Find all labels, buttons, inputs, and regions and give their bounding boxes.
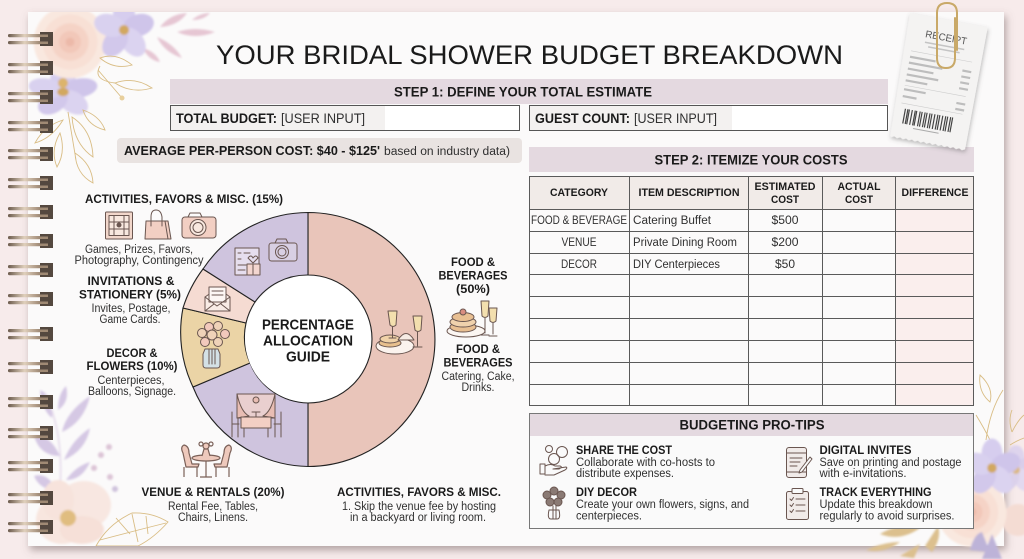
cost table xyxy=(529,176,974,406)
donut centre label: GUIDE xyxy=(286,348,330,366)
receipt: RECEIPT xyxy=(924,29,968,48)
note: activities, favors and misc tip xyxy=(337,485,501,524)
icon: bouquet xyxy=(543,487,565,519)
icon: hand with coins xyxy=(540,446,568,475)
tip: share the cost: SHARE THE COST xyxy=(576,443,673,457)
tip: share the cost: distribute expenses. xyxy=(576,468,674,480)
tip: diy decor: Create your own flowers, signs, and xyxy=(576,499,749,511)
label: invitations and stationery 5%: Invites, Postage, xyxy=(92,303,170,315)
step 1 header xyxy=(170,79,888,104)
note: activities, favors and misc tip: ACTIVITIES, FAVORS & MISC. xyxy=(337,485,501,499)
label: food and beverages 50%: FOOD & xyxy=(456,342,500,356)
tip: diy decor: DIY DECOR xyxy=(576,485,637,499)
receipt with paper clip xyxy=(887,3,988,151)
label: food and beverages 50%: Drinks. xyxy=(462,382,494,394)
label: decor and flowers 10%: Centerpieces, xyxy=(98,375,164,387)
receipt xyxy=(887,13,988,151)
floral decoration: top left xyxy=(25,0,215,183)
step 1 header: STEP 1: DEFINE YOUR TOTAL ESTIMATE xyxy=(394,84,652,100)
tip: track everything: TRACK EVERYTHING xyxy=(820,485,932,499)
row: food and beverage: $500 xyxy=(772,215,798,227)
tip: diy decor xyxy=(543,485,749,522)
table header row xyxy=(529,176,974,209)
label: food and beverages 50%: BEVERAGES xyxy=(438,268,508,282)
paper clip xyxy=(937,3,957,68)
label: food and beverages 50% xyxy=(438,255,514,394)
note: activities, favors and misc tip: 1. Skip the venue fee by hosting xyxy=(342,501,496,513)
table header row: CATEGORY xyxy=(550,187,609,199)
segment: decor and flowers 10% xyxy=(181,308,250,387)
total budget input: TOTAL BUDGET: xyxy=(176,111,277,126)
guest count input: GUEST COUNT: xyxy=(535,111,630,126)
label: venue and rentals 20%: Rental Fee, Tables, xyxy=(168,501,258,513)
table header row: COST xyxy=(771,194,799,206)
segment: activities 15% xyxy=(203,212,308,302)
donut centre label: ALLOCATION xyxy=(263,332,353,350)
tip: track everything: Update this breakdown xyxy=(820,499,932,511)
label: venue and rentals 20% xyxy=(142,442,285,524)
row: venue: $200 xyxy=(772,237,798,249)
tip: share the cost xyxy=(540,443,715,480)
tip: diy decor: centerpieces. xyxy=(576,510,642,522)
difference column tint xyxy=(896,209,974,405)
note: activities, favors and misc tip: in a backyard or living room. xyxy=(350,512,486,524)
label: activities, favors and misc 15%: ACTIVITIES, FAVORS & MISC. (15%) xyxy=(85,192,283,206)
table grid xyxy=(530,176,974,406)
label: invitations and stationery 5%: INVITATIONS & xyxy=(88,274,175,288)
floral decoration: bottom right xyxy=(866,375,1024,559)
segment: food and beverages 50% xyxy=(308,212,435,466)
row: food and beverage xyxy=(531,215,798,227)
donut centre label: PERCENTAGE xyxy=(262,316,354,334)
label: invitations and stationery 5%: STATIONERY (5%) xyxy=(79,288,181,302)
tip: share the cost: Collaborate with co-hosts to xyxy=(576,457,715,469)
row: venue: Private Dining Room xyxy=(633,237,737,249)
tip: track everything xyxy=(786,485,954,522)
spiral binding rings xyxy=(8,32,53,534)
row: decor xyxy=(561,259,795,271)
label: venue and rentals 20%: Chairs, Linens. xyxy=(178,512,248,524)
icon: game board xyxy=(106,212,132,239)
tip: digital invites: DIGITAL INVITES xyxy=(820,443,912,457)
pro-tips header: BUDGETING PRO-TIPS xyxy=(680,418,824,432)
total budget input: [USER INPUT] xyxy=(281,111,365,126)
tip: digital invites: with e-invitations. xyxy=(819,468,906,480)
row: venue: VENUE xyxy=(562,237,597,249)
row: decor: DIY Centerpieces xyxy=(633,259,720,271)
icon: envelope in donut xyxy=(205,287,230,311)
icon: pancakes and champagne xyxy=(447,301,497,337)
label: food and beverages 50%: Catering, Cake, xyxy=(442,371,514,383)
segment: venue and rentals 20% xyxy=(193,363,308,466)
title: YOUR BRIDAL SHOWER BUDGET BREAKDOWN xyxy=(216,40,843,70)
row: decor: DECOR xyxy=(561,259,597,271)
step 2 header xyxy=(529,147,974,172)
label: invitations and stationery 5%: Game Cards. xyxy=(100,314,160,326)
icon: venue in donut xyxy=(232,394,281,437)
icon: tablet and pen xyxy=(786,448,812,478)
row: food and beverage: Catering Buffet xyxy=(633,215,712,227)
label: venue and rentals 20%: VENUE & RENTALS (20%) xyxy=(142,485,285,499)
icon: camera in donut xyxy=(269,239,297,261)
average per-person cost callout xyxy=(117,138,522,163)
label: activities, favors and misc 15% xyxy=(74,192,283,267)
table header row: ITEM DESCRIPTION xyxy=(638,187,740,199)
step 1 panel xyxy=(170,79,888,130)
label: food and beverages 50%: BEVERAGES xyxy=(444,356,512,370)
average per-person cost callout: based on industry data) xyxy=(384,146,510,158)
table header row: DIFFERENCE xyxy=(902,187,968,199)
guest count input xyxy=(530,106,888,130)
icon: camera xyxy=(182,213,216,238)
donut centre label xyxy=(245,276,371,402)
label: decor and flowers 10% xyxy=(86,346,178,398)
icon: games list in donut xyxy=(235,248,260,275)
label: activities, favors and misc 15%: Photography, Contingency xyxy=(74,255,204,267)
icon: clipboard checklist xyxy=(786,488,808,520)
row: decor: $50 xyxy=(775,259,795,271)
floral decoration: bottom left xyxy=(34,386,168,546)
guest count input: [USER INPUT] xyxy=(634,111,717,126)
tip: digital invites: Save on printing and postage xyxy=(820,457,962,469)
row: venue xyxy=(562,237,798,249)
budgeting pro-tips panel xyxy=(530,414,974,528)
total budget input xyxy=(170,106,520,130)
table header row: ESTIMATED xyxy=(754,181,816,193)
icon: flower bouquet in donut xyxy=(198,322,230,368)
segment: invitations 5% xyxy=(183,269,255,323)
label: decor and flowers 10%: FLOWERS (10%) xyxy=(86,359,178,373)
step 2 header: STEP 2: ITEMIZE YOUR COSTS xyxy=(654,152,848,168)
row: food and beverage: FOOD & BEVERAGE xyxy=(531,215,627,227)
icon: bistro table xyxy=(182,442,231,477)
label: food and beverages 50%: (50%) xyxy=(456,282,490,296)
table header row: ACTUAL xyxy=(838,181,881,193)
donut chart xyxy=(181,212,435,466)
label: decor and flowers 10%: Balloons, Signage. xyxy=(88,386,176,398)
tip: track everything: regularly to avoid surprises. xyxy=(820,510,954,522)
pro-tips header xyxy=(530,414,973,436)
tip: digital invites xyxy=(786,443,962,480)
average per-person cost callout: AVERAGE PER-PERSON COST: $40 - $125' xyxy=(124,143,380,158)
icon: shopping bag xyxy=(145,210,171,239)
label: decor and flowers 10%: DECOR & xyxy=(106,346,158,360)
label: invitations and stationery 5% xyxy=(79,274,181,326)
icon: food in donut xyxy=(376,311,422,354)
table header row: COST xyxy=(845,194,873,206)
label: activities, favors and misc 15%: Games, Prizes, Favors, xyxy=(85,244,193,256)
label: food and beverages 50%: FOOD & xyxy=(451,255,495,269)
